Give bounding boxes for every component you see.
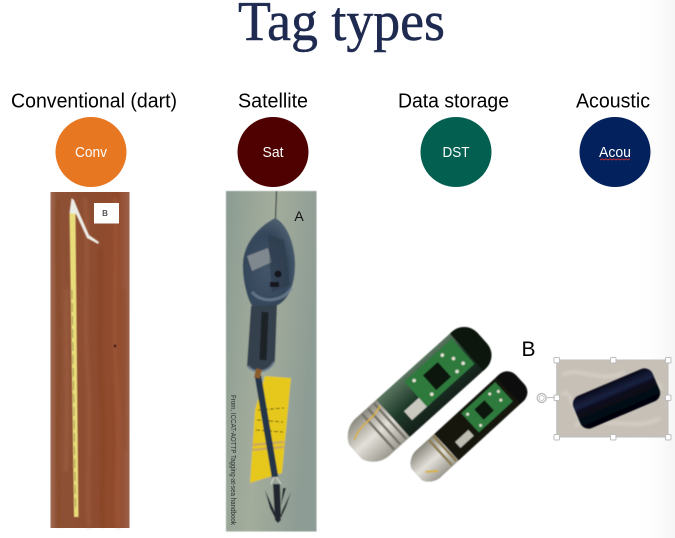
dart barb [70,198,99,244]
label box B [94,203,119,224]
tag neck [247,305,277,372]
photo: dart tag on wood [50,192,130,528]
rotate handle [537,394,555,402]
badge: Sat: Sat [262,144,284,161]
photo: acoustic tag [537,358,671,440]
anchor [265,484,291,523]
selection handles [554,358,671,440]
badge: Acou: Acou [599,144,631,161]
source note: From, ICCAT-AOTTP Tagging-at-sea handbook [229,395,236,525]
heading: acoustic: Acoustic [576,90,650,112]
badge: DST [420,117,492,187]
badge: Acou [580,117,650,187]
heading: data storage: Data storage [398,90,509,112]
badge: Sat [238,117,308,187]
column: satellite [226,90,316,532]
column: data storage [339,90,536,488]
label B: B [521,338,536,361]
badge: Conv [56,117,126,187]
antenna [276,191,277,219]
column: acoustic [537,90,671,440]
photo: satellite tag [226,191,316,532]
tag body [243,218,295,307]
cable [258,376,275,477]
small capsule [405,366,532,488]
yellow sleeve [250,376,291,483]
label A: A [294,208,304,224]
badge: DST: DST [442,144,470,161]
label box B: B [102,209,108,218]
photo: data storage tags [339,319,532,488]
heading: conventional: Conventional (dart) [11,90,177,112]
dart stick [70,213,78,517]
column: conventional [11,90,177,528]
heading: satellite: Satellite [238,90,308,112]
badge: Conv: Conv [75,144,107,161]
large capsule [339,319,499,471]
